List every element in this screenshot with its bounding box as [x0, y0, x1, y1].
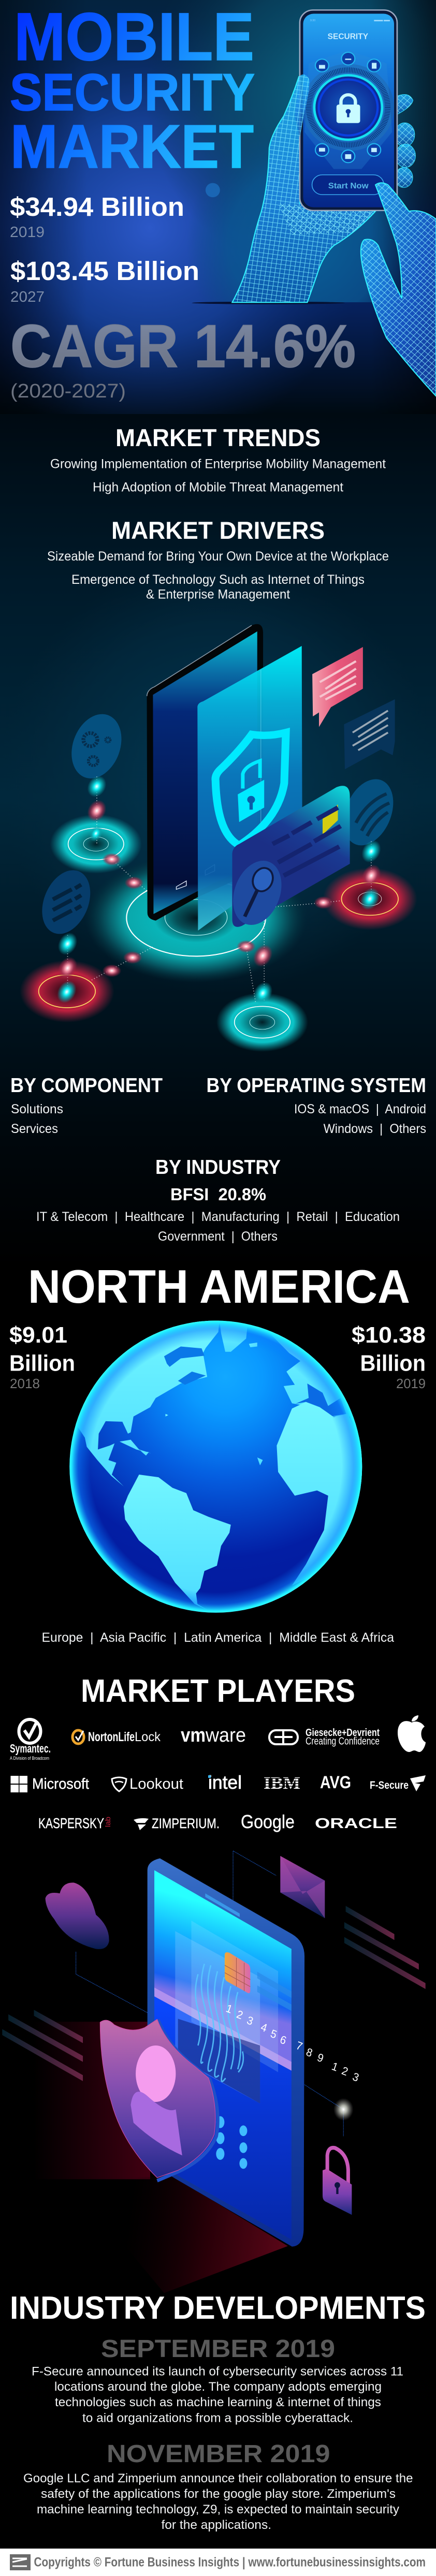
illustration: second hand [361, 183, 436, 396]
logo: giesecke devrient: Giesecke+Devrient [306, 1727, 380, 1739]
illustration: hand holding phone [192, 10, 415, 304]
greenland [220, 1324, 248, 1352]
shield with user [100, 2019, 218, 2181]
section: market drivers: MARKET DRIVERS [111, 517, 325, 544]
stat: 2019 value [10, 192, 184, 241]
segment: by component: Solutions [11, 1102, 63, 1116]
segment: by component: Services [11, 1122, 58, 1136]
title: SECURITY [10, 64, 255, 122]
development: november 2019: safety of the applications for the google play store. Zimperium's [41, 2487, 396, 2501]
logo: vmware: ware [205, 1725, 246, 1746]
icons: security features [315, 52, 381, 163]
logo: zimperium [134, 1816, 220, 1831]
logo: lookout: Lookout [129, 1776, 183, 1792]
icon: padlock [337, 95, 360, 123]
icon: fingerprint [196, 1964, 243, 2082]
stat: 2019 regional value: Billion [360, 1351, 426, 1376]
title: MARKET [10, 112, 254, 181]
heading: industry developments: INDUSTRY DEVELOPMENTS [10, 2290, 426, 2326]
payment card [225, 786, 350, 931]
development: november 2019: NOVEMBER 2019 [107, 2440, 330, 2468]
phone [300, 10, 397, 211]
logo: google: Google [241, 1811, 295, 1832]
logo: f-secure [370, 1775, 426, 1791]
icon: light spark [333, 2098, 354, 2121]
section: market drivers [47, 517, 389, 602]
globe [67, 1317, 367, 1613]
dotted connectors [68, 777, 371, 1004]
caribbean islands [120, 1414, 263, 1465]
section: market trends: High Adoption of Mobile Threat Management [93, 480, 343, 495]
section: market trends: Growing Implementation of Enterprise Mobility Management [50, 457, 386, 472]
panel: trends, drivers and illustration background [0, 414, 436, 1268]
stat: 2019 value: 2019 [10, 224, 45, 241]
development: september 2019: SEPTEMBER 2019 [101, 2335, 335, 2363]
north america landmass [67, 1317, 220, 1486]
stat: 2018 value: 2018 [10, 1376, 40, 1391]
phone: 9:30 [310, 19, 315, 22]
icon: padlock [323, 2148, 352, 2215]
stat: 2019 value: $34.94 Billion [10, 192, 184, 222]
title: MOBILE [14, 0, 254, 75]
icon: card chip [225, 1952, 250, 1993]
segment: by industry: Government | Others [158, 1229, 278, 1244]
stat: 2018 value: $9.01 [9, 1322, 67, 1348]
segment: by operating system [206, 1074, 426, 1136]
stat: 2018 value: Billion [9, 1351, 75, 1376]
development: september 2019: F-Secure announced its launch of cybersecurity services across 11 [32, 2364, 403, 2378]
chat bubble: pink [312, 647, 363, 727]
stat: 2019 regional value: $10.38 [352, 1322, 426, 1348]
title [10, 0, 255, 181]
development: september 2019: to aid organizations from a possible cyberattack. [82, 2411, 353, 2425]
diagonal streaks [2, 1906, 426, 2081]
europe [271, 1332, 351, 1417]
logo: symantec [10, 1719, 51, 1761]
logo: oracle: ORACLE [315, 1815, 397, 1831]
stat: CAGR: (2020-2027) [10, 380, 126, 402]
stat: 2018 value [9, 1322, 75, 1391]
segment: by industry: IT & Telecom | Healthcare | Manufacturing | Retail | Education [36, 1210, 400, 1224]
logo: symantec: A Division of Broadcom [10, 1756, 49, 1761]
red glow [28, 2022, 288, 2293]
logo: nortonlifelock: NortonLife [88, 1730, 135, 1744]
stat: 2019 regional value [352, 1322, 426, 1391]
segment: by industry [36, 1156, 400, 1244]
section: industry developments [10, 2290, 426, 2532]
logo: vmware: vm [181, 1725, 206, 1746]
heading: north america: NORTH AMERICA [28, 1261, 410, 1313]
development: november 2019: Google LLC and Zimperium announce their collaboration to ensure the [23, 2471, 413, 2485]
stat: CAGR: CAGR 14.6% [10, 312, 356, 380]
logo: symantec: Symantec. [10, 1742, 51, 1755]
stat: 2027 value: 2027 [10, 289, 45, 305]
hero background [0, 0, 436, 414]
phone: Start Now [328, 182, 369, 190]
logo: intel: intel [208, 1772, 242, 1793]
section: market drivers: Emergence of Technology Such as Internet of Things [71, 572, 365, 587]
phone body [148, 1858, 304, 2247]
icon: fortune business insights logo [10, 2554, 31, 2570]
segment: by industry: BFSI 20.8% [170, 1185, 266, 1204]
stat: 2027 value: $103.45 Billion [10, 256, 199, 286]
logo: f-secure: F-Secure [370, 1779, 409, 1791]
heading: market players: MARKET PLAYERS [81, 1673, 355, 1709]
segment: by operating system: IOS & macOS | Android [294, 1102, 426, 1116]
stat: 2019 regional value: 2019 [396, 1376, 426, 1391]
panel: hero [0, 0, 436, 414]
icon: fingerprint blob [335, 773, 402, 852]
phone: SECURITY [328, 33, 369, 41]
development: september 2019: locations around the globe. The company adopts emerging [54, 2380, 382, 2394]
logo: apple [398, 1715, 426, 1752]
development: november 2019: machine learning technology, Z9, is expected to maintain security [37, 2503, 399, 2516]
keypad dots [216, 2116, 247, 2169]
number sequence: 123456789123 [224, 2003, 360, 2084]
logo: microsoft [10, 1776, 89, 1792]
development: november 2019 [23, 2440, 413, 2532]
chat bubble: dark [344, 699, 395, 769]
icon: menu blob [33, 864, 99, 940]
south america [124, 1475, 231, 1611]
tablet [147, 624, 263, 921]
glow dots [53, 773, 385, 1007]
segment: by industry: BY INDUSTRY [155, 1156, 281, 1179]
illustration: isometric phone with biometric security [2, 1851, 426, 2293]
glowing rings [20, 814, 417, 1052]
logo: nortonlifelock: Lock [135, 1730, 161, 1744]
logo: giesecke devrient [269, 1727, 380, 1747]
logo: ibm: IBM [264, 1774, 300, 1793]
phone screen [154, 1870, 292, 2240]
footer [0, 2549, 436, 2576]
development: november 2019: for the applications. [162, 2518, 271, 2532]
other regions list: Europe | Asia Pacific | Latin America | Middle East & Africa [41, 1630, 394, 1645]
segment: by operating system: Windows | Others [324, 1122, 426, 1136]
stat: 2027 value [10, 256, 199, 305]
connector lines [76, 1851, 343, 2136]
logo: kaspersky: lab [104, 1817, 112, 1827]
logo: kaspersky: KASPERSKY [38, 1815, 104, 1831]
development: september 2019 [32, 2335, 403, 2425]
section: market trends [50, 424, 386, 495]
logo: vmware [181, 1725, 246, 1746]
logo: giesecke devrient: Creating Confidence [306, 1736, 380, 1747]
development: september 2019: technologies such as machine learning & internet of things [55, 2395, 381, 2409]
logo: microsoft: Microsoft [32, 1776, 89, 1792]
section: market drivers: & Enterprise Management [146, 587, 290, 602]
icon: cloud [46, 1882, 109, 1949]
icon: envelope [280, 1856, 325, 1918]
icon: shield and padlock [215, 732, 286, 845]
illustration: tablet security with glowing nodes [20, 624, 417, 1052]
logo: avg: AVG [320, 1773, 351, 1792]
translucent shield panel [197, 646, 302, 931]
segment: by component: BY COMPONENT [10, 1074, 163, 1097]
section: market drivers: Sizeable Demand for Bring Your Own Device at the Workplace [47, 549, 389, 564]
africa [277, 1402, 367, 1585]
section: market trends: MARKET TRENDS [115, 424, 321, 451]
logo: zimperium: ZIMPERIUM. [152, 1816, 220, 1831]
segment: by component [10, 1074, 163, 1136]
icon: gears blob [63, 708, 130, 785]
